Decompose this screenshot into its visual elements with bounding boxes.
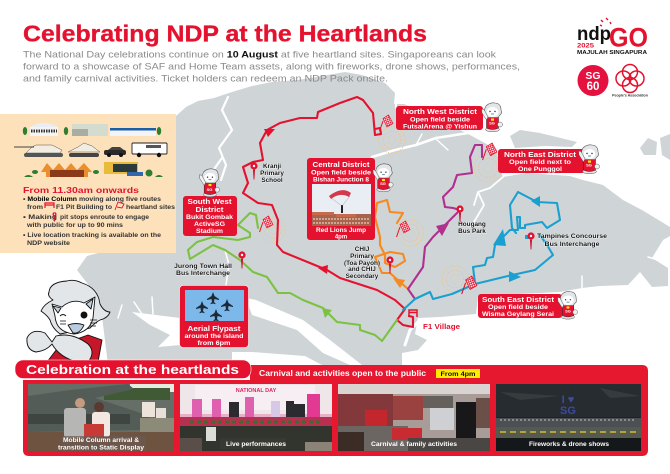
arrow: [322, 308, 332, 318]
callout: North East District: Open field next to: [509, 160, 571, 166]
list: mobile column details: [23, 196, 176, 247]
list: mobile column details: pit stops enroute to engage: [60, 214, 150, 221]
callout: North West District: Open field beside: [410, 118, 471, 124]
icons: military vehicles row: [14, 143, 167, 157]
route: red (north west): [243, 97, 413, 327]
callout: aerial flypast: [180, 286, 248, 348]
callout: aerial flypast: around the island: [184, 334, 244, 340]
callout: South West District: SG: [207, 187, 212, 192]
photo: fireworks and drones: I ♥: [562, 394, 574, 406]
photo: carnival activities: [338, 384, 490, 451]
pin: Kranji Primary School: Kranji: [263, 163, 281, 170]
pin: Kranji Primary School: School: [261, 177, 283, 184]
logo: SG60: [578, 65, 608, 96]
pin: Hougang Bus Park: [456, 205, 486, 235]
pin: CHIJ Primary and Secondary: [344, 246, 394, 280]
list: mobile column details: • Mobile Column moving along five routes: [23, 196, 162, 203]
arrow: [264, 129, 275, 137]
marker: F1 Village: F1 Village: [423, 322, 460, 331]
photo: live performances: NATIONAL DAY: [236, 388, 277, 394]
heading bar: [15, 360, 251, 378]
arrow: [393, 278, 405, 288]
list: mobile column details: from: [27, 204, 43, 211]
route: blue (south east): [403, 192, 560, 310]
photo: live performances: [180, 384, 332, 451]
map of Singapore: [77, 72, 670, 365]
pin: Kranji Primary School: [250, 162, 284, 184]
callout: North West District: FutsalArena @ Yishun: [403, 124, 477, 130]
icons: community buildings row: [24, 162, 163, 177]
callout: Central District: Bishan Junction 8: [313, 178, 370, 184]
logo: ndpGO: MAJULAH SINGAPURA: [577, 50, 647, 56]
mascot: lion waving: [27, 280, 110, 362]
callout: aerial flypast: Aerial Flypast: [188, 326, 241, 333]
pin: Tampines Concourse Bus Interchange: [525, 232, 607, 250]
photo: live performances: Live performances: [226, 441, 287, 448]
flag markers: [260, 115, 497, 294]
pin: Tampines Concourse Bus Interchange: Tampines Concourse: [537, 233, 607, 240]
callout: South East District: Wisma Geylang Serai: [482, 312, 554, 318]
pin: CHIJ Primary and Secondary: CHIJ: [355, 246, 370, 253]
panel: mobile column: [0, 114, 176, 253]
logo: People's Association: People's Association: [612, 94, 648, 98]
photo: red lions parachutist: [312, 184, 371, 226]
island: Pulau Ubin: [510, 130, 577, 148]
callout: Central District: 4pm: [335, 234, 347, 240]
icons: jets: [196, 292, 233, 321]
badge: from 4pm: [436, 369, 480, 378]
logo: ndpGO: ndp: [577, 24, 611, 45]
callout: North East District: North East District: [504, 152, 577, 159]
title: Celebrating NDP at the Heartlands: [23, 20, 427, 46]
photo: fireworks and drones: [496, 384, 641, 451]
callout: South East District: Open field beside: [488, 305, 549, 311]
logo: People's Association: [612, 64, 648, 98]
photo: mobile column: [28, 384, 174, 452]
marker: F1 Village: [409, 310, 460, 331]
pin: Jurong Town Hall Bus Interchange: Jurong Town Hall: [174, 263, 232, 270]
callout: South West District: Stadium: [196, 229, 223, 235]
icons: landmarks row: [23, 123, 161, 136]
intro text: [23, 50, 520, 84]
callout: South East District: [478, 291, 578, 319]
badge: from 4pm: From 4pm: [440, 371, 476, 378]
heading: from 11.30am onwards: From 11.30am onwards: [23, 185, 139, 195]
list: mobile column details: with public for up to 90 mins: [26, 222, 124, 229]
logo: SG60: SG: [585, 70, 601, 82]
sea: southern waters: [132, 298, 362, 365]
logo: ndpGO: [577, 18, 648, 56]
callout: South East District: South East District: [482, 297, 555, 304]
arrow: [531, 196, 540, 207]
callout: Central District: Central District: [312, 162, 370, 169]
arrow: [493, 229, 506, 246]
callout: North East District: SG: [586, 162, 592, 168]
route: purple (north east): [408, 145, 482, 299]
intro text: and family carnival activities. Ticket holders can redeem an NDP Pack onsite.: [23, 74, 388, 84]
photo: fireworks and drones: SG: [560, 405, 576, 417]
list: mobile column details: • Making: [23, 214, 57, 221]
fireworks markers: [261, 127, 502, 292]
pin: Hougang Bus Park: Hougang: [458, 221, 486, 228]
logo: SG60: 60: [587, 81, 599, 93]
photo: carnival activities: Carnival & family activities: [371, 441, 458, 448]
logo: ndpGO: GO: [609, 22, 648, 52]
callout: South West District: Bukit Gombak: [186, 215, 234, 221]
pin: CHIJ Primary and Secondary: and CHIJ: [348, 266, 376, 273]
callout: South West District: District: [196, 207, 224, 214]
pin: Hougang Bus Park: Bus Park: [458, 228, 486, 235]
arrow: [436, 223, 449, 236]
pin: CHIJ Primary and Secondary: (Toa Payoh): [344, 260, 380, 267]
list: mobile column details: • Live location tracking is available on the: [23, 232, 162, 239]
callout: Central District: Open field beside: [311, 170, 372, 176]
pin: Jurong Town Hall Bus Interchange: [174, 251, 246, 277]
list: mobile column details: heartland sites: [126, 204, 176, 211]
pin: Jurong Town Hall Bus Interchange: Bus Interchange: [176, 270, 230, 277]
arrow: [509, 271, 521, 282]
callout: North West District: SG: [489, 120, 495, 126]
intro text: The National Day celebrations continue on 10 August at five heartland sites. Singaporeans can look: [23, 50, 496, 60]
pin: Tampines Concourse Bus Interchange: Bus Interchange: [544, 241, 600, 248]
callout: North East District: One Punggol: [518, 167, 562, 173]
callout: North West District: [396, 103, 502, 132]
route: orange (central): [375, 200, 408, 289]
list: mobile column details: NDP website: [27, 240, 71, 247]
heading bar: Celebration at the heartlands: [26, 362, 239, 377]
waterways: [118, 95, 665, 345]
callout: North West District: North West District: [403, 109, 478, 116]
callout: South West District: [183, 169, 237, 236]
pin: CHIJ Primary and Secondary: Primary: [350, 253, 374, 260]
callout: aerial flypast: from 6pm: [198, 341, 230, 347]
callout: Central District: SG: [380, 181, 386, 186]
photo: mobile column: Mobile Column arrival &: [63, 437, 140, 444]
callout: South East District: SG: [565, 308, 571, 314]
callout: North East District: [498, 145, 600, 174]
callout: Central District: Red Lions Jump: [316, 227, 366, 234]
panel: celebration at the heartlands: [15, 360, 648, 456]
photo: mobile column: transition to Static Display: [58, 444, 145, 452]
arrow: [318, 265, 328, 274]
logo: ndpGO: 2025: [577, 42, 594, 50]
route: green (south west): [188, 213, 397, 341]
pin: CHIJ Primary and Secondary: Secondary: [346, 273, 379, 280]
callout: South West District: South West: [188, 199, 232, 206]
list: mobile column details: F1 Pit Building to: [56, 204, 112, 211]
callout: South West District: ActiveSG: [194, 222, 225, 228]
subheading: Carnival and activities open to the public: [259, 369, 427, 378]
callout: Central District: [307, 158, 393, 240]
pin: Kranji Primary School: Primary: [260, 170, 284, 177]
photo: fireworks and drones: Fireworks & drone shows: [529, 441, 610, 448]
island: Pulau Tekong: [640, 134, 670, 160]
intro text: forward to a showcase of SAF and Home Team assets, along with fireworks, drone shows, performances,: [23, 62, 520, 72]
